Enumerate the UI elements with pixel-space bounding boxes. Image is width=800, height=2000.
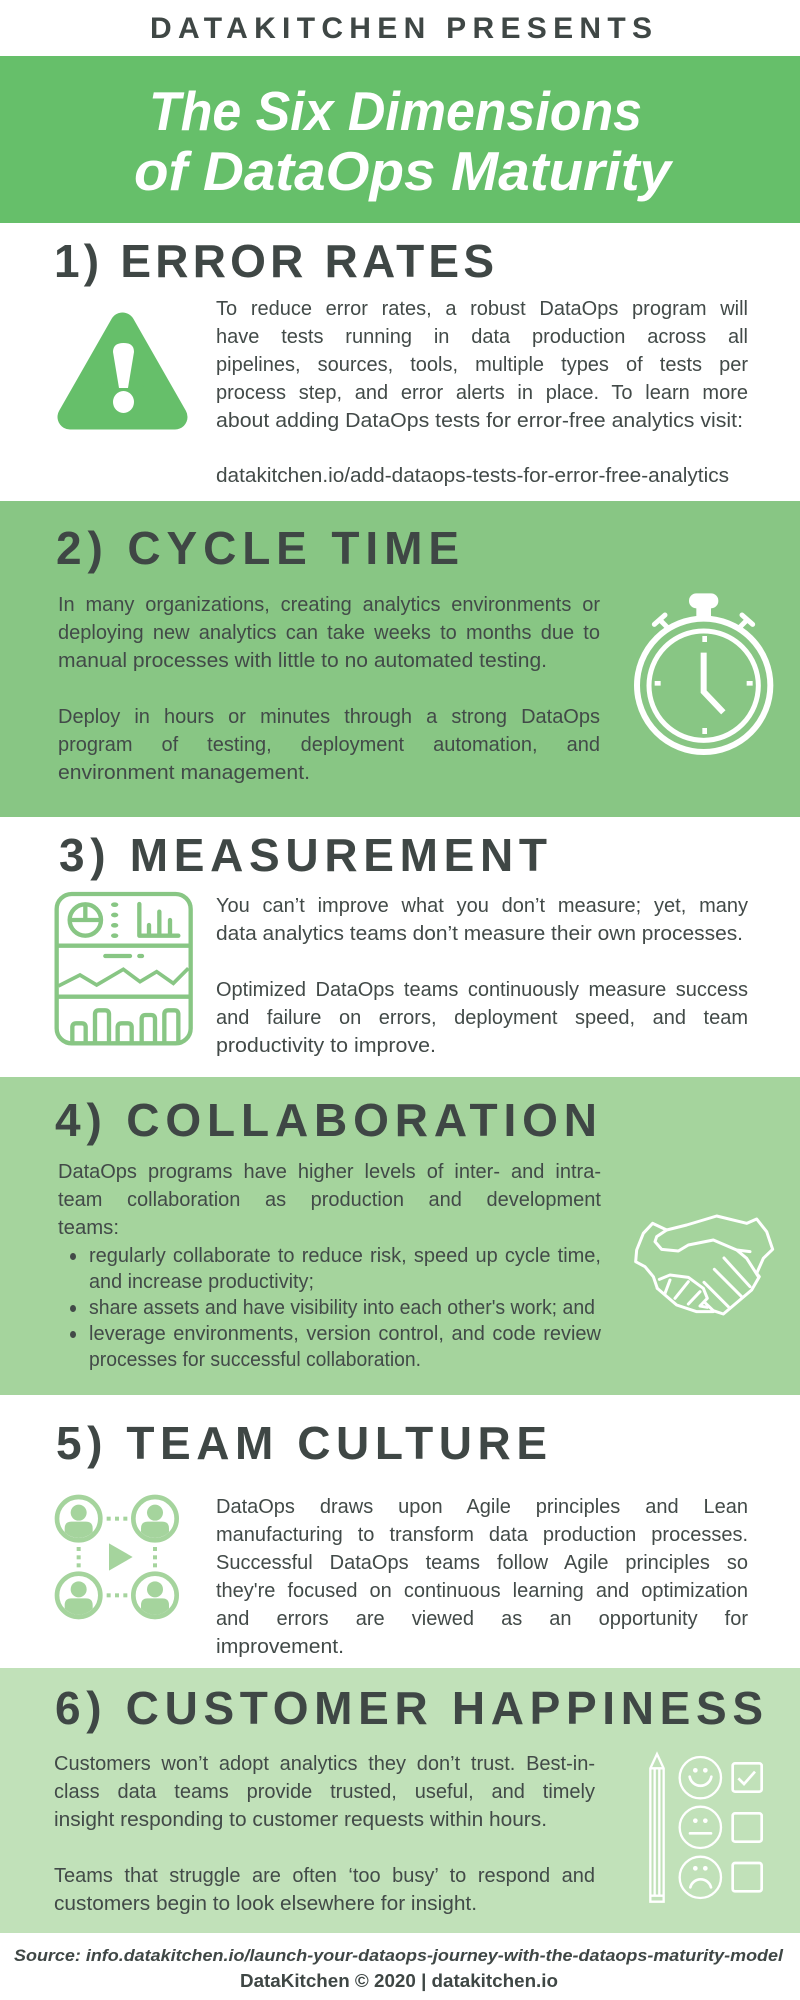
text: customer happiness body: insight responding to customer requests within hours. [54,1809,547,1831]
icon: warning triangle [58,312,188,430]
text: measurement body: Optimized DataOps teams continuously measure success [216,979,748,1001]
bullet list: share assets and have visibility into each other's work; and [89,1297,595,1319]
text: cycle time body: program of testing, deployment automation, and [58,734,600,756]
text: error rates body [216,298,748,487]
bullet list: processes for successful collaboration. [89,1349,421,1371]
text: collaboration intro [58,1161,601,1239]
text: measurement body: data analytics teams don’t measure their own processes. [216,923,743,945]
text: team culture body: DataOps draws upon Agile principles and Lean [216,1496,748,1518]
heading: cycle time: 2) CYCLE TIME [56,522,459,574]
text: customer happiness body: customers begin to look elsewhere for insight. [54,1893,477,1915]
heading: measurement: 3) MEASUREMENT [59,829,547,881]
title text: The Six Dimensions [149,80,642,142]
source line: Source: info.datakitchen.io/launch-your-dataops-journey-with-the-dataops-maturity-model [14,1946,784,1965]
text: error rates body: To reduce error rates, a robust DataOps program will [216,298,748,320]
header: datakitchen presents: DATAKITCHEN PRESENTS [150,12,652,45]
text: customer happiness body: Customers won’t adopt analytics they don’t trust. Best-in- [54,1753,595,1775]
icon: handshake [634,1214,774,1316]
text: error rates body: pipelines, sources, tools, multiple types of tests per [216,354,748,376]
text: error rates body: about adding DataOps tests for error-free analytics visit: [216,410,743,432]
text: cycle time body: In many organizations, creating analytics environments or [58,594,600,616]
icon: survey with smileys [649,1752,763,1903]
text: cycle time body [58,594,600,784]
panel: customer happiness [0,1668,800,1933]
panel: error rates [0,223,800,501]
text: error rates body: have tests running in data production across all [216,326,748,348]
icon: team network [54,1494,179,1620]
text: measurement body [216,895,748,1057]
text: cycle time body: environment management. [58,762,310,784]
text: team culture body: and errors are viewed as an opportunity for [216,1608,748,1630]
title text: of DataOps Maturity [134,140,673,202]
bullet list [70,1245,601,1371]
icon: stopwatch [634,593,774,755]
text: team culture body: Successful DataOps teams follow Agile principles so [216,1552,748,1574]
text: error rates body: process step, and error alerts in place. To learn more [216,382,748,404]
text: customer happiness body [54,1753,595,1915]
bullet list: and increase productivity; [89,1271,314,1293]
text: team culture body: manufacturing to transform data production processes. [216,1524,748,1546]
panel: measurement [0,817,800,1077]
text: measurement body: You can’t improve what you don’t measure; yet, many [216,895,748,917]
text: measurement body: and failure on errors, deployment speed, and team [216,1007,748,1029]
text: cycle time body: manual processes with little to no automated testing. [58,650,547,672]
heading: team culture: 5) TEAM CULTURE [56,1417,547,1469]
text: cycle time body: Deploy in hours or minutes through a strong DataOps [58,706,600,728]
heading: collaboration: 4) COLLABORATION [55,1094,597,1146]
text: collaboration intro: team collaboration as production and development [58,1189,601,1211]
heading: error rates: 1) ERROR RATES [54,235,494,287]
panel: cycle time [0,501,800,817]
text: team culture body: improvement. [216,1636,344,1658]
text: team culture body: they're focused on continuous learning and optimization [216,1580,748,1602]
text: collaboration intro: teams: [58,1217,119,1239]
text: collaboration intro: DataOps programs have higher levels of inter- and intra- [58,1161,601,1183]
bullet list: leverage environments, version control, and code review [89,1323,601,1345]
text: cycle time body: deploying new analytics can take weeks to months due to [58,622,600,644]
title text [134,80,674,202]
panel: team culture [54,1426,748,1657]
copyright line: DataKitchen © 2020 | datakitchen.io [240,1971,558,1991]
heading: customer happiness: 6) CUSTOMER HAPPINESS [55,1682,763,1734]
text: customer happiness body: class data teams provide trusted, useful, and timely [54,1781,595,1803]
panel: collaboration [0,1077,800,1395]
text: customer happiness body: Teams that struggle are often ‘too busy’ to respond and [54,1865,595,1887]
text: team culture body [216,1496,748,1658]
text: measurement body: productivity to improve. [216,1035,436,1057]
text: error rates body: datakitchen.io/add-dataops-tests-for-error-free-analytics [216,465,729,487]
bullet list: regularly collaborate to reduce risk, speed up cycle time, [89,1245,601,1267]
footer [0,1933,800,2000]
icon: dashboard [54,892,193,1046]
title banner [0,56,800,223]
